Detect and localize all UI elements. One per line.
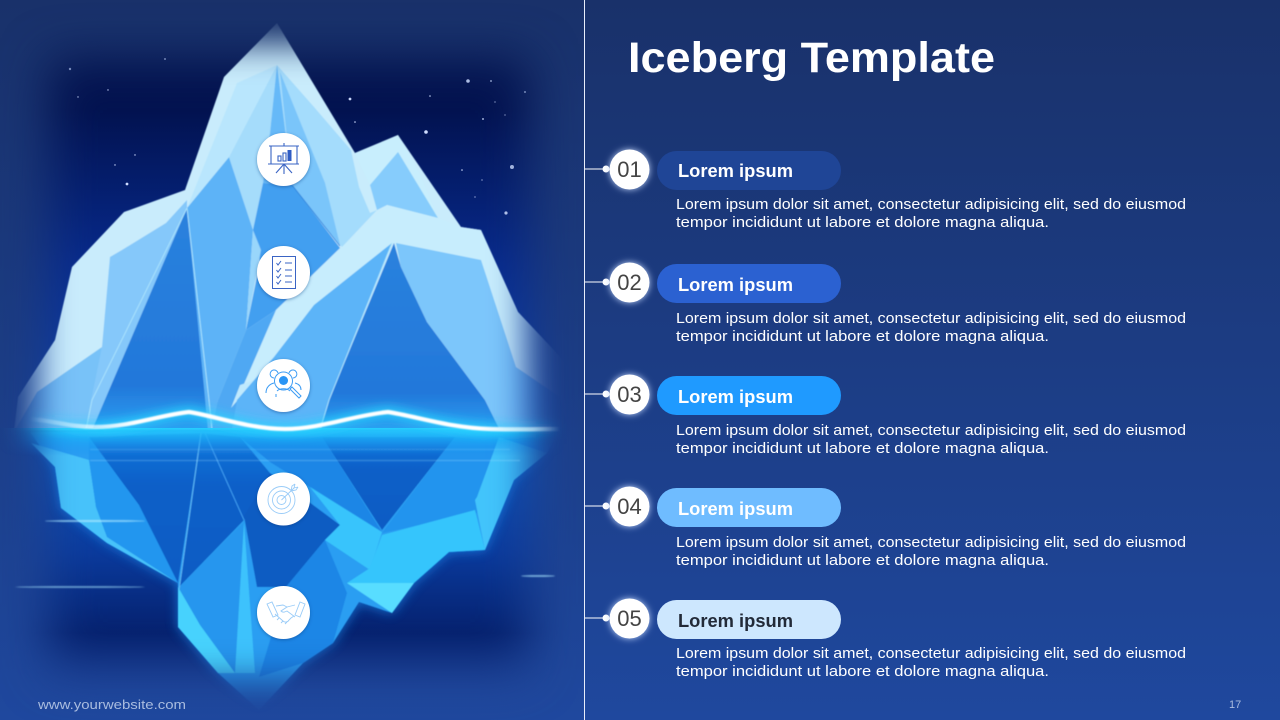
icon circle: people search (257, 359, 310, 412)
item 05: tempor incididunt ut labore et dolore magna aliqua. (676, 663, 1049, 680)
item 04: 04 (617, 494, 642, 519)
item 01 (585, 150, 1186, 231)
item 01: Lorem ipsum (678, 160, 793, 181)
water surface band (13, 428, 540, 452)
water streaks (15, 449, 555, 588)
item 03: Lorem ipsum (678, 386, 793, 407)
item 04: Lorem ipsum dolor sit amet, consectetur adipisicing elit, sed do eiusmod (676, 534, 1186, 551)
title: Iceberg Template (628, 34, 995, 82)
item 02: Lorem ipsum dolor sit amet, consectetur adipisicing elit, sed do eiusmod (676, 310, 1186, 327)
item 02: tempor incididunt ut labore et dolore magna aliqua. (676, 328, 1049, 345)
icon circle: target (257, 472, 310, 526)
item 04 (585, 486, 1186, 569)
icon circle: presentation board (257, 133, 310, 186)
item 03: Lorem ipsum dolor sit amet, consectetur adipisicing elit, sed do eiusmod (676, 422, 1186, 439)
item 03: 03 (617, 382, 642, 407)
item 01: tempor incididunt ut labore et dolore magna aliqua. (676, 214, 1049, 231)
item 04: tempor incididunt ut labore et dolore magna aliqua. (676, 552, 1049, 569)
iceberg illustration (0, 23, 584, 710)
waterline glow (30, 412, 560, 429)
icon circle: checklist (257, 246, 310, 299)
item 02: 02 (617, 270, 642, 295)
night sky and deep water panel (28, 42, 551, 681)
item 05: Lorem ipsum dolor sit amet, consectetur adipisicing elit, sed do eiusmod (676, 645, 1186, 662)
item 02 (585, 262, 1186, 345)
item 03: tempor incididunt ut labore et dolore magna aliqua. (676, 440, 1049, 457)
item 01: 01 (617, 157, 642, 182)
underwater glow (41, 454, 534, 690)
item 05: Lorem ipsum (678, 610, 793, 631)
iceberg above water (14, 23, 570, 430)
item 04: Lorem ipsum (678, 498, 793, 519)
icon circle: handshake (257, 586, 310, 639)
item 05 (585, 598, 1186, 680)
item 03 (585, 374, 1186, 457)
footer website: www.yourwebsite.com (37, 697, 186, 712)
page number: 17 (1229, 699, 1241, 711)
divider line (584, 0, 586, 720)
item 02: Lorem ipsum (678, 274, 793, 295)
iceberg below water (30, 430, 560, 710)
item 01: Lorem ipsum dolor sit amet, consectetur adipisicing elit, sed do eiusmod (676, 196, 1186, 213)
item 05: 05 (617, 606, 642, 631)
